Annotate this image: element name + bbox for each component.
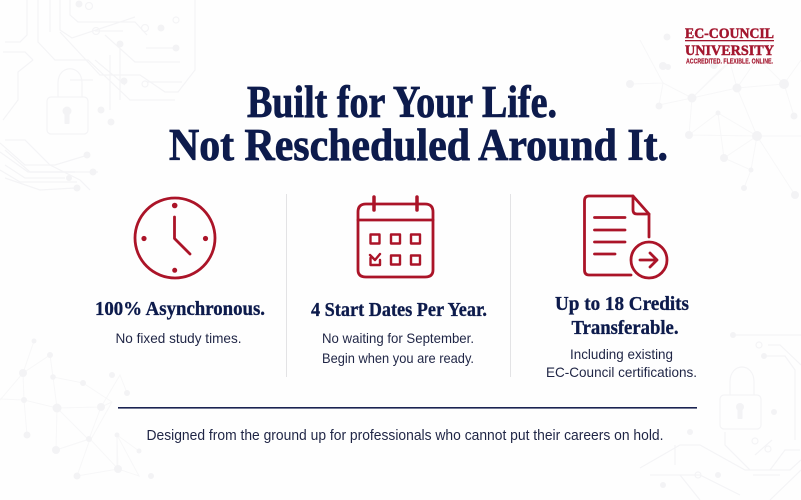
icon: calendar [358, 197, 433, 277]
heading: 100% Asynchronous: 100% Asynchronous. [95, 298, 265, 320]
divider left [286, 194, 287, 377]
title [169, 77, 668, 170]
title: Built for Your Life. [247, 77, 557, 127]
title: Not Rescheduled Around It. [169, 120, 668, 170]
icon: document with arrow [584, 196, 667, 278]
heading: up to 18 credits transferable: Transferable. [572, 317, 678, 339]
text: including existing: Including existing [570, 346, 673, 362]
background: node network top right [626, 33, 801, 199]
text: no waiting for September: Begin when you are ready. [322, 350, 474, 366]
background: circuit pattern bottom right [640, 332, 801, 500]
heading: 4 start dates per year: 4 Start Dates Per Year. [311, 299, 487, 321]
logo: EC-Council University [685, 26, 775, 66]
heading: up to 18 credits transferable [555, 293, 689, 339]
panel: asynchronous [95, 198, 265, 346]
divider right [510, 194, 511, 377]
panel: start dates [311, 197, 487, 366]
background: padlock left [47, 69, 88, 134]
text: including existing: EC-Council certifications. [546, 364, 697, 380]
text: including existing [546, 346, 697, 380]
rule [118, 407, 697, 409]
icon: clock [135, 198, 215, 278]
panel: credits [546, 196, 697, 380]
logo: EC-Council University: UNIVERSITY [685, 43, 775, 59]
logo: EC-Council University: EC-COUNCIL [685, 26, 774, 42]
text: no waiting for September [322, 330, 474, 366]
heading: up to 18 credits transferable: Up to 18 Credits [555, 293, 689, 315]
background: circuit pattern top left [0, 0, 195, 192]
text: no waiting for September: No waiting for September. [322, 330, 474, 346]
footer text: Designed from the ground up for professionals who cannot put their careers on hold. [146, 428, 664, 444]
text: no fixed study times: No fixed study times. [116, 330, 242, 346]
logo: EC-Council University: ACCREDITED. FLEXIBLE. ONLINE. [686, 58, 773, 66]
background: node network bottom left [0, 338, 154, 480]
background: padlock right [720, 367, 761, 429]
